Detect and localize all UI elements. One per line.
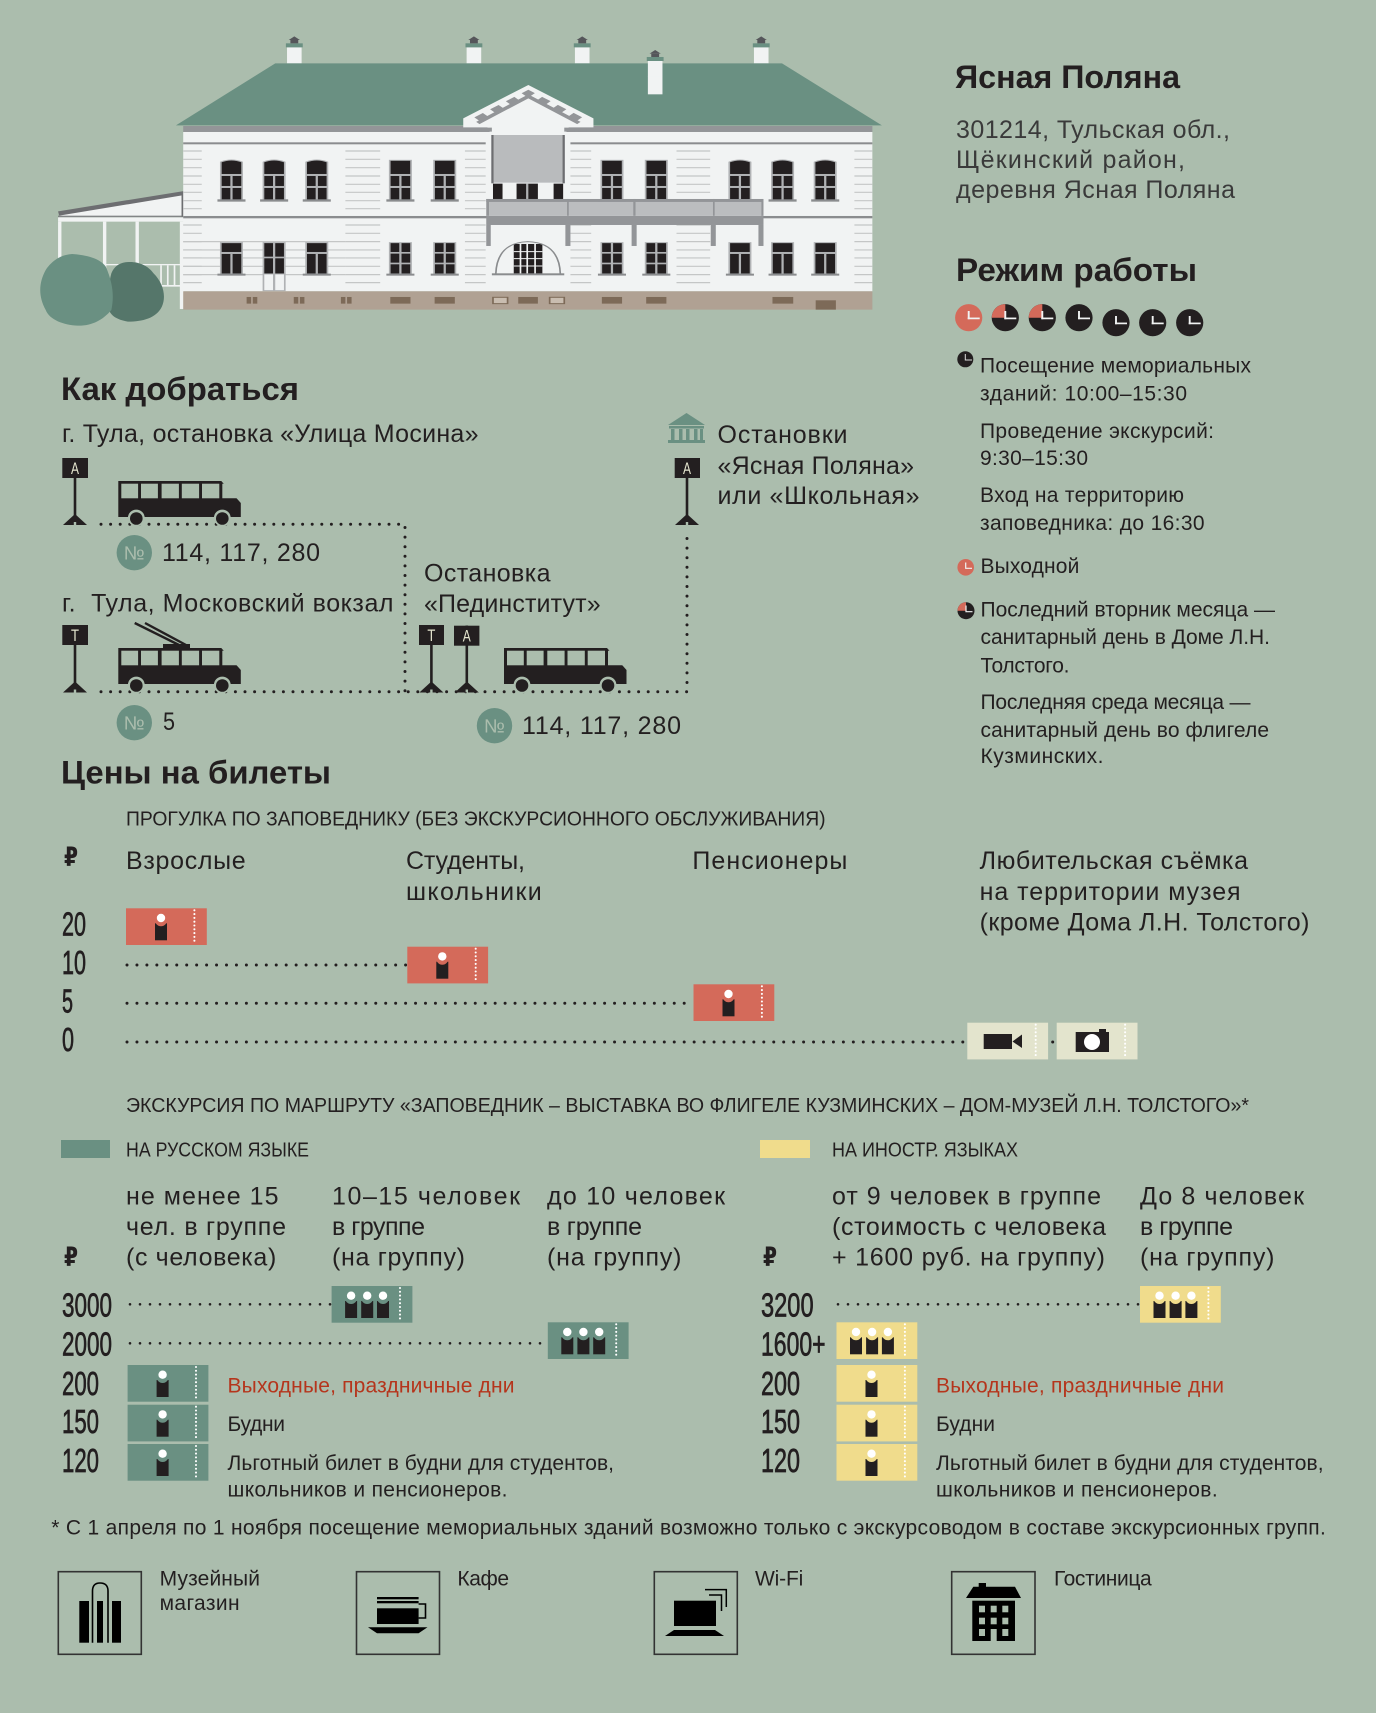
legend: foreign languages xyxy=(760,1140,1018,1162)
text: sanitary days: Толстого. xyxy=(980,654,1070,677)
label: Moscow station: г. Тула, Московский вокзал xyxy=(62,590,394,618)
dotted price lines xyxy=(127,965,1054,1042)
legend: Russian xyxy=(61,1140,309,1162)
arched window xyxy=(492,242,564,275)
price scale: Russian: 200 xyxy=(62,1365,99,1402)
price scale: 0 xyxy=(62,1021,74,1058)
column headers: (кроме Дома Л.Н. Толстого) xyxy=(980,908,1309,936)
column headers: foreign: в группе xyxy=(1140,1213,1233,1241)
panel: excursion prices xyxy=(51,1093,1326,1539)
icon: bus xyxy=(504,648,626,693)
label: destination stops: или «Школьная» xyxy=(718,482,920,510)
icon: hotel xyxy=(952,1572,1035,1654)
notes: Russian: школьников и пенсионеров. xyxy=(228,1479,508,1502)
route numbers: 114, 117, 280 xyxy=(522,712,681,740)
ticket: video free xyxy=(967,1023,1048,1059)
price scale: foreign: 120 xyxy=(761,1442,800,1479)
heading: opening hours: Режим работы xyxy=(956,252,1197,288)
notes: foreign: Будни xyxy=(936,1413,995,1436)
rouble sign: ₽ xyxy=(64,842,78,873)
bushes xyxy=(40,254,164,326)
notes: foreign xyxy=(936,1374,1324,1502)
column headers: foreign: от 9 человек в группе xyxy=(832,1183,1101,1211)
route numbers: 114, 117, 280 xyxy=(162,539,320,567)
route number badge xyxy=(117,705,152,740)
legend: foreign languages: НА ИНОСТР. ЯЗЫКАХ xyxy=(832,1140,1018,1162)
icon: museum shop xyxy=(58,1572,141,1654)
column headers: Russian: (на группу) xyxy=(332,1244,465,1272)
price scale: foreign: 1600+ xyxy=(761,1326,826,1363)
column headers: Russian: в группе xyxy=(332,1213,425,1241)
dotted price lines xyxy=(130,1304,1141,1343)
icon: museum xyxy=(668,413,705,443)
route dotted lines xyxy=(101,524,687,692)
upper windows xyxy=(217,160,839,202)
address text: Щёкинский район, xyxy=(956,146,1185,174)
roof xyxy=(176,63,882,125)
label: wi-fi: Wi-Fi xyxy=(755,1568,803,1591)
trolleybus stop sign T: Т xyxy=(71,626,79,645)
price scale: Russian xyxy=(62,1287,112,1479)
column headers: Russian: (с человека) xyxy=(126,1244,276,1272)
column headers: foreign: (на группу) xyxy=(1140,1244,1274,1272)
tickets: foreign groups xyxy=(836,1286,1221,1359)
price scale: foreign: 3200 xyxy=(761,1287,814,1324)
subheading: excursion route: ЭКСКУРСИЯ ПО МАРШРУТУ «ЗАПОВЕДНИК – ВЫСТАВКА ВО ФЛИГЕЛЕ КУЗМИНСКИХ – ДОМ-МУЗЕЙ Л.Н. ТОЛСТОГО»* xyxy=(126,1093,1249,1117)
route number badge: № xyxy=(484,716,505,738)
notes: foreign: школьников и пенсионеров. xyxy=(936,1479,1218,1502)
label: destination stops: «Ясная Поляна» xyxy=(718,452,914,480)
notes: foreign: Выходные, праздничные дни xyxy=(936,1374,1224,1397)
icon: sanitary day clock xyxy=(958,602,974,619)
heading: how to get there: Как добраться xyxy=(61,371,299,407)
notes: Russian: Будни xyxy=(228,1413,285,1436)
ticket: students 10 xyxy=(407,947,488,983)
footnote: * С 1 апреля по 1 ноября посещение мемориальных зданий возможно только с экскурсоводом в составе экскурсионных групп. xyxy=(51,1516,1326,1539)
title: Ясная Поляна xyxy=(955,59,1180,95)
column headers: Пенсионеры xyxy=(692,847,847,875)
label: Pedinstitut stop: Остановка xyxy=(424,560,551,588)
column headers: Russian: 10–15 человек xyxy=(332,1183,521,1211)
tickets: Russian groups xyxy=(332,1286,629,1359)
text: visiting hours: Вход на территорию xyxy=(980,484,1184,507)
column headers: школьники xyxy=(406,878,542,906)
ticket: pensioners 5 xyxy=(694,984,774,1021)
label: destination stops xyxy=(718,421,920,510)
price scale: Russian: 150 xyxy=(62,1403,99,1440)
column headers: Russian: не менее 15 xyxy=(126,1183,278,1211)
tickets: foreign single xyxy=(836,1365,917,1481)
icon: cafe xyxy=(356,1572,440,1654)
price scale: foreign: 150 xyxy=(761,1403,800,1440)
legend: Russian: НА РУССКОМ ЯЗЫКЕ xyxy=(126,1140,309,1162)
price scale: foreign: 200 xyxy=(761,1365,800,1402)
foundation xyxy=(183,291,872,310)
label: Pedinstitut stop xyxy=(424,560,601,618)
address text: деревня Ясная Поляна xyxy=(956,176,1235,204)
icon: trolleybus xyxy=(118,623,241,693)
trolleybus stop sign T xyxy=(62,625,88,692)
route number badge xyxy=(117,535,152,570)
route number badge: № xyxy=(124,714,145,734)
icon: week clocks xyxy=(955,304,1203,336)
column headers: Студенты, xyxy=(406,847,525,875)
price scale: Russian: 2000 xyxy=(62,1326,112,1363)
column headers: Взрослые xyxy=(126,847,246,875)
walls xyxy=(183,126,872,291)
price scale: Russian: 3000 xyxy=(62,1287,112,1324)
label: museum shop: магазин xyxy=(160,1592,240,1615)
price scale: foreign xyxy=(761,1287,826,1479)
text: sanitary days: санитарный день во флигеле xyxy=(980,719,1269,742)
tickets: Russian single xyxy=(128,1365,208,1481)
notes: Russian: Выходные, праздничные дни xyxy=(228,1374,514,1397)
column headers: Russian: до 10 человек xyxy=(547,1183,726,1211)
text: sanitary days: Кузминских. xyxy=(980,745,1104,768)
column headers: foreign: (стоимость с человека xyxy=(832,1213,1106,1241)
label: museum shop xyxy=(160,1568,260,1615)
address text xyxy=(956,116,1235,204)
panel: opening hours xyxy=(955,252,1275,768)
ticket: photo free xyxy=(1057,1023,1138,1059)
panel: how to get there xyxy=(61,371,920,743)
icon: day off clock xyxy=(957,559,974,576)
text: visiting hours: 9:30–15:30 xyxy=(980,447,1088,470)
stop sign A at destination xyxy=(675,458,700,525)
text: visiting hours: зданий: 10:00–15:30 xyxy=(980,383,1187,406)
address text: 301214, Тульская обл., xyxy=(956,116,1230,144)
rouble signs xyxy=(64,1242,777,1273)
panel: address xyxy=(955,59,1235,204)
stop signs T and A: Т xyxy=(427,626,435,645)
lower windows xyxy=(217,243,839,291)
text: sanitary days: Последний вторник месяца — xyxy=(980,599,1275,622)
text: sanitary days xyxy=(980,599,1275,768)
column headers: Любительская съёмка xyxy=(980,847,1248,875)
pediment xyxy=(463,85,593,135)
notes: foreign: Льготный билет в будни для студентов, xyxy=(936,1452,1324,1475)
rouble signs: ₽ xyxy=(763,1242,777,1273)
text: visiting hours: заповедника: до 16:30 xyxy=(980,512,1205,535)
column headers xyxy=(126,847,1309,936)
icon: wi-fi xyxy=(654,1572,737,1654)
notes: Russian xyxy=(228,1374,614,1502)
price scale: Russian: 120 xyxy=(62,1442,99,1479)
text: day off: Выходной xyxy=(980,555,1079,578)
label: hotel: Гостиница xyxy=(1054,1568,1152,1591)
panel: ticket prices walk xyxy=(61,754,1309,1059)
route number badge: № xyxy=(124,544,145,564)
column headers: на территории музея xyxy=(980,878,1241,906)
ticket: adults 20 xyxy=(126,908,207,945)
price scale: 20 xyxy=(62,906,86,943)
bus stop sign A xyxy=(62,458,88,525)
column headers: Russian: чел. в группе xyxy=(126,1213,286,1241)
route number: 5 xyxy=(163,708,175,736)
label: cafe: Кафе xyxy=(457,1568,509,1591)
stop sign A at destination: А xyxy=(683,459,691,478)
central panel and balcony xyxy=(486,135,763,246)
column headers: Russian: в группе xyxy=(547,1213,642,1241)
subheading: walk: ПРОГУЛКА ПО ЗАПОВЕДНИКУ (БЕЗ ЭКСКУРСИОННОГО ОБСЛУЖИВАНИЯ) xyxy=(126,809,826,831)
price scale xyxy=(62,906,86,1058)
column headers: foreign xyxy=(832,1183,1305,1272)
column headers: Russian: (на группу) xyxy=(547,1244,682,1272)
column headers: foreign: До 8 человек xyxy=(1140,1183,1305,1211)
route number badge xyxy=(477,708,512,743)
panel: services xyxy=(58,1568,1152,1654)
veranda xyxy=(58,191,185,309)
stop signs T and A: А xyxy=(463,626,471,646)
building illustration xyxy=(40,36,882,326)
icon: bus xyxy=(118,481,241,526)
chimneys xyxy=(286,36,770,63)
rouble signs: ₽ xyxy=(64,1242,78,1273)
column headers: Russian xyxy=(126,1183,726,1272)
text: visiting hours: Проведение экскурсий: xyxy=(980,420,1214,443)
price scale: 5 xyxy=(62,983,73,1020)
label: Pedinstitut stop: «Пединститут» xyxy=(424,590,601,618)
label: museum shop: Музейный xyxy=(160,1568,260,1591)
price scale: 10 xyxy=(62,944,86,981)
label: destination stops: Остановки xyxy=(718,421,848,449)
icon: visiting hours clock xyxy=(957,351,973,367)
text: visiting hours: Посещение мемориальных xyxy=(980,355,1252,378)
text: sanitary days: Последняя среда месяца — xyxy=(980,691,1250,714)
text: visiting hours xyxy=(980,355,1252,535)
bus stop sign A: А xyxy=(71,459,79,478)
stop signs T and A xyxy=(419,625,479,692)
text: sanitary days: санитарный день в Доме Л.Н. xyxy=(980,626,1270,649)
column headers: foreign: + 1600 руб. на группу) xyxy=(832,1244,1105,1272)
label: Ulitsa Mosina stop: г. Тула, остановка «Улица Мосина» xyxy=(62,420,478,448)
heading: ticket prices: Цены на билеты xyxy=(61,754,331,790)
notes: Russian: Льготный билет в будни для студентов, xyxy=(228,1452,614,1475)
